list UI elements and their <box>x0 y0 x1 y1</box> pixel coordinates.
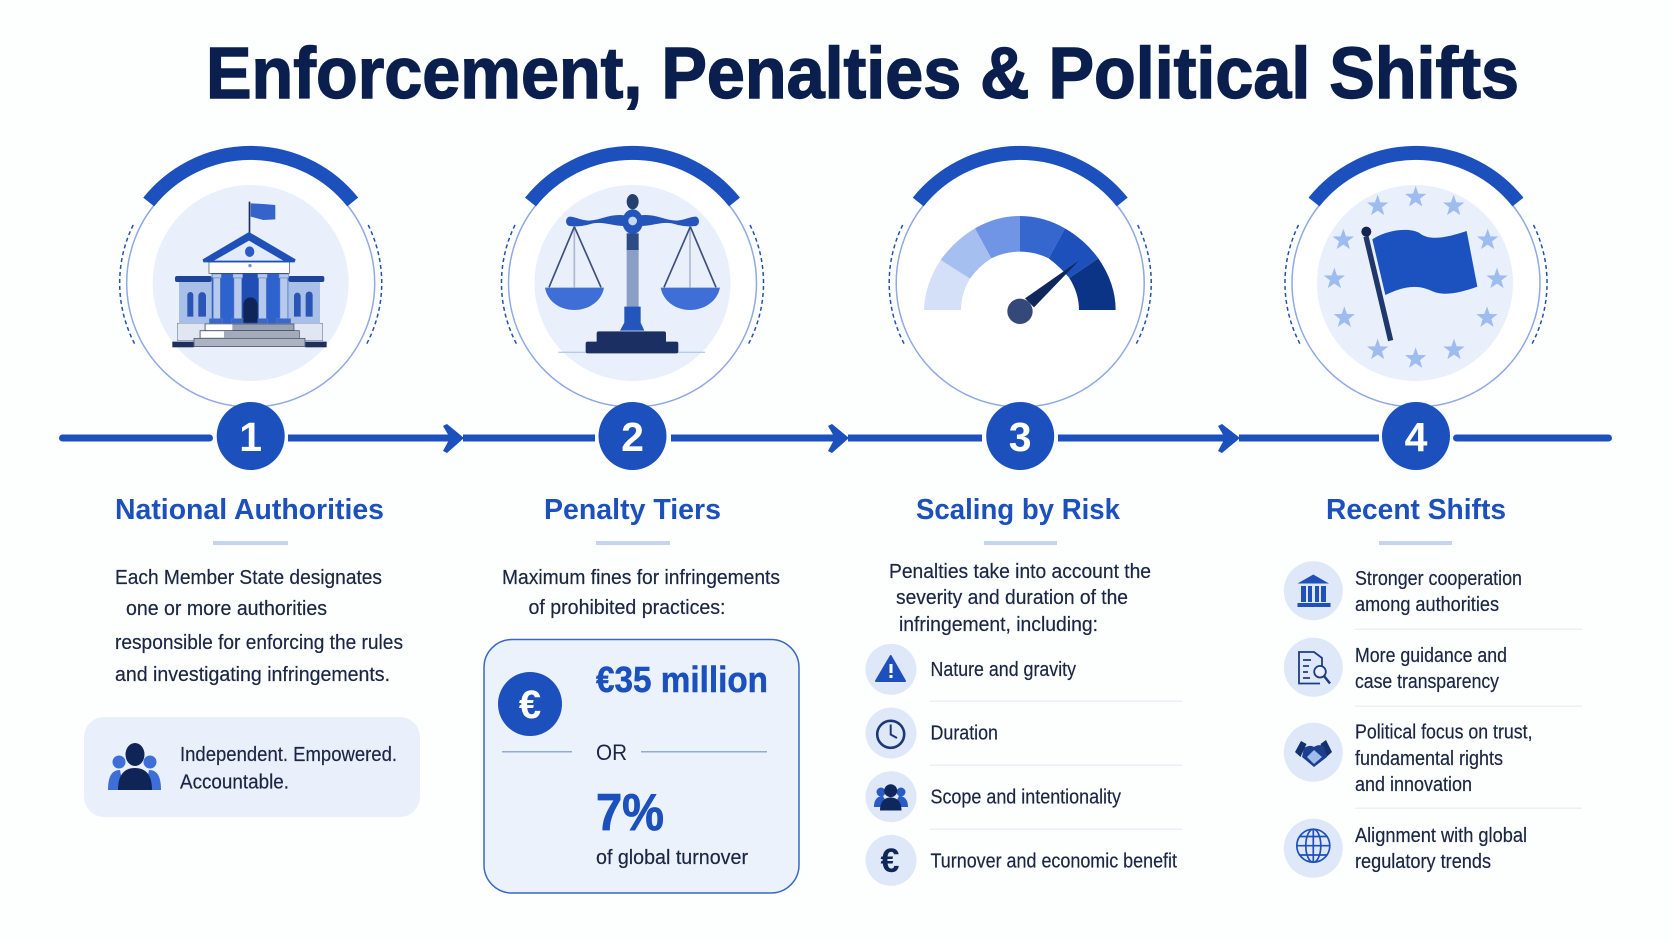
heading: recent shifts: Recent Shifts <box>1326 494 1506 526</box>
text block: authorities description: Each Member State designates <box>115 567 382 589</box>
medallion 2: scales of justice <box>501 153 764 407</box>
icon: scales of justice <box>545 194 720 353</box>
panel: penalty tiers <box>484 494 799 893</box>
shift: more guidance: case transparency <box>1355 671 1499 693</box>
heading: national authorities: National Authorities <box>115 494 384 526</box>
shift: alignment with global trends: regulatory trends <box>1355 851 1491 873</box>
medallion 3: severity gauge <box>889 153 1151 407</box>
text block: authorities description: and investigating infringements. <box>115 664 390 686</box>
step number 2: 2 <box>621 414 644 460</box>
medallion 4: EU flag <box>1285 153 1547 407</box>
callout: fine amounts: of global turnover <box>596 847 748 869</box>
callout: fine amounts: 7% <box>596 784 664 842</box>
factor: scope and intentionality: Scope and intentionality <box>930 786 1121 808</box>
step number 3 <box>986 402 1054 470</box>
callout: fine amounts: €35 million <box>596 659 768 700</box>
medallion 1: government building <box>120 153 382 407</box>
factor: nature and gravity: Nature and gravity <box>930 659 1076 681</box>
shift: alignment with global trends: Alignment with global <box>1355 825 1527 847</box>
panel: scaling by risk <box>866 494 1182 886</box>
callout: fine amounts: OR <box>596 740 627 765</box>
panel: recent shifts <box>1284 494 1582 878</box>
shift: political focus: Political focus on trust, <box>1355 722 1532 744</box>
factor: turnover and economic benefit <box>866 835 1177 886</box>
text block: authorities description: responsible for enforcing the rules <box>115 632 403 654</box>
panel: national authorities <box>84 494 420 817</box>
icon: government building <box>172 202 327 347</box>
step number 4 <box>1382 402 1450 470</box>
shift: stronger cooperation: Stronger cooperation <box>1355 568 1522 590</box>
step number 1 <box>217 402 285 470</box>
shift: political focus: and innovation <box>1355 774 1472 796</box>
heading: scaling by risk: Scaling by Risk <box>916 494 1121 526</box>
timeline arrow line <box>59 424 1612 453</box>
text block: penalties description <box>889 561 1151 636</box>
step number 1: 1 <box>239 414 262 460</box>
shift: stronger cooperation: among authorities <box>1355 594 1499 616</box>
factor: nature and gravity <box>866 644 1076 695</box>
callout: independent, empowered, accountable: Accountable. <box>180 772 289 794</box>
icon: euro badge <box>498 672 562 736</box>
text block: maximum fines <box>502 567 780 619</box>
icon: euro badge: € <box>519 683 541 727</box>
step number 4: 4 <box>1405 414 1428 460</box>
callout: independent, empowered, accountable <box>84 717 420 817</box>
text block: maximum fines: Maximum fines for infringements <box>502 567 780 589</box>
shift: political focus: fundamental rights <box>1355 748 1503 770</box>
factor: scope and intentionality <box>866 771 1121 822</box>
shift: alignment with global trends <box>1284 819 1527 878</box>
text block: maximum fines: of prohibited practices: <box>528 597 726 619</box>
factor: duration: Duration <box>930 722 998 744</box>
shift: more guidance: More guidance and <box>1355 645 1507 667</box>
text block: penalties description: severity and duration of the <box>896 587 1128 609</box>
factor: turnover and economic benefit: € <box>881 842 900 880</box>
step number 3: 3 <box>1009 414 1032 460</box>
step number 2 <box>598 402 666 470</box>
factor: turnover and economic benefit: Turnover and economic benefit <box>930 850 1177 872</box>
factor: duration <box>866 708 998 758</box>
icon: flag with ring of stars <box>1324 186 1508 368</box>
shift: political focus <box>1284 722 1532 796</box>
text block: penalties description: Penalties take into account the <box>889 561 1151 583</box>
shift: more guidance <box>1284 638 1507 697</box>
callout: independent, empowered, accountable: Independent. Empowered. <box>180 744 397 766</box>
heading: penalty tiers: Penalty Tiers <box>544 494 721 526</box>
icon: gauge <box>924 216 1116 324</box>
text block: authorities description: one or more authorities <box>126 598 327 620</box>
text block: authorities description <box>115 567 403 686</box>
shift: stronger cooperation <box>1284 561 1522 620</box>
icon: people <box>108 743 161 790</box>
title: Enforcement, Penalties & Political Shifts <box>206 34 1519 114</box>
callout: fine amounts <box>484 640 799 893</box>
text block: penalties description: infringement, including: <box>899 614 1098 636</box>
